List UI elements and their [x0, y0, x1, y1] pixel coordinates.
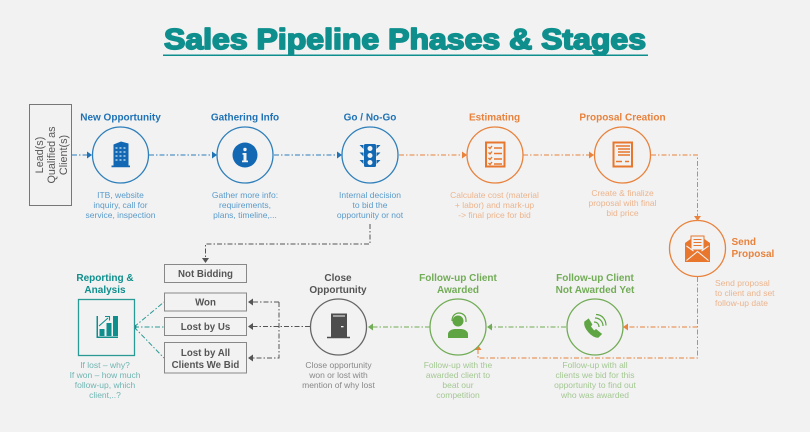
- panel: close opportunity: Close opportunity: [305, 360, 372, 370]
- icon: door: [327, 314, 350, 338]
- panel: proposal creation: bid price: [606, 208, 639, 218]
- panel: gathering info: requirements,: [219, 200, 271, 210]
- panel: go / no-go: Internal decision: [339, 190, 401, 200]
- panel: gathering info: plans, timeline,...: [213, 210, 277, 220]
- panel: gathering info: Gather more info:: [212, 190, 278, 200]
- panel: close opportunity: won or lost with: [308, 370, 368, 380]
- icon: building: [112, 142, 130, 167]
- status: won: [164, 293, 246, 311]
- arrow: gathering info to go/no-go: [274, 152, 342, 158]
- panel: follow-up client awarded: Follow-up Client: [419, 273, 498, 284]
- panel: follow-up client awarded: competition: [436, 390, 480, 400]
- arrow: new opportunity to gathering info: [149, 152, 217, 158]
- panel: estimating: Estimating: [469, 112, 520, 124]
- icon: checklist: [486, 142, 504, 166]
- arrow: go/no-go to not bidding: [202, 224, 370, 263]
- arrow: not awarded to awarded: [487, 324, 566, 330]
- panel: new opportunity: [80, 112, 161, 220]
- arrow: leads to new opportunity: [72, 152, 92, 158]
- icon: phone: [585, 314, 606, 337]
- panel: send proposal: Send: [732, 237, 756, 248]
- status: not bidding: Not Bidding: [178, 269, 233, 280]
- panel: go / no-go: to bid the: [353, 200, 388, 210]
- panel: send proposal: to client and set: [715, 288, 775, 298]
- panel: reporting and analysis: Analysis: [84, 285, 126, 296]
- status: lost by us: [164, 318, 246, 336]
- status: not bidding: [164, 264, 246, 282]
- panel: proposal creation: Proposal Creation: [579, 112, 666, 124]
- panel: go / no-go: [337, 112, 404, 220]
- panel: follow-up client awarded: Awarded: [437, 285, 479, 296]
- status: lost by us: Lost by Us: [181, 322, 230, 333]
- panel: reporting and analysis: Reporting &: [76, 273, 134, 284]
- box: leads qualified as clients: Lead(s): [34, 137, 46, 173]
- panel: follow-up client not awarded yet: who was awarded: [560, 390, 629, 400]
- panel: follow-up client not awarded yet: [554, 273, 637, 400]
- panel: follow-up client not awarded yet: Follow-up Client: [556, 273, 635, 284]
- panel: follow-up client not awarded yet: Follow-up with all: [562, 360, 628, 370]
- panel: new opportunity: New Opportunity: [80, 112, 161, 124]
- panel: reporting and analysis: client,..?: [89, 390, 121, 400]
- status: lost by all clients we bid: Lost by All: [181, 348, 230, 359]
- panel: follow-up client awarded: [419, 273, 498, 400]
- arrow: proposal creation to send proposal: [651, 155, 701, 221]
- status: lost by all clients we bid: [164, 342, 246, 373]
- panel: close opportunity: [302, 273, 376, 390]
- panel: reporting and analysis: [70, 273, 141, 400]
- panel: follow-up client not awarded yet: clients we bid for this: [556, 370, 634, 380]
- panel: new opportunity: ITB, website: [97, 190, 144, 200]
- panel: reporting and analysis: If won – how much: [70, 370, 141, 380]
- icon: headset person: [448, 313, 468, 338]
- panel: close opportunity: Close: [324, 273, 352, 284]
- icon: envelope with letter: [685, 236, 710, 262]
- arrow: estimating to proposal creation: [523, 152, 594, 158]
- box: leads qualified as clients: [30, 104, 72, 206]
- panel: close opportunity: Opportunity: [309, 285, 367, 296]
- panel: proposal creation: [579, 112, 666, 218]
- connector: outcomes to reporting: [132, 302, 164, 358]
- panel: estimating: [450, 112, 539, 220]
- status: lost by all clients we bid: Clients We Bid: [172, 360, 239, 371]
- panel: reporting and analysis: follow-up, which: [75, 380, 136, 390]
- status: won: Won: [195, 298, 216, 308]
- panel: send proposal: Send proposal: [715, 278, 770, 288]
- panel: send proposal: follow-up date: [715, 298, 768, 308]
- panel: go / no-go: opportunity or not: [337, 210, 404, 220]
- panel: new opportunity: inquiry, call for: [93, 200, 148, 210]
- panel: close opportunity: mention of why lost: [302, 380, 376, 390]
- panel: follow-up client not awarded yet: Not Awarded Yet: [556, 285, 635, 296]
- box: leads qualified as clients: Qualified as: [46, 126, 58, 184]
- panel: estimating: Calculate cost (material: [450, 190, 539, 200]
- panel: follow-up client not awarded yet: opportunity to find out: [554, 380, 637, 390]
- icon: document: [614, 142, 632, 166]
- panel: send proposal: Proposal: [732, 249, 775, 260]
- panel: proposal creation: Create & finalize: [591, 188, 654, 198]
- panel: follow-up client awarded: Follow-up with the: [424, 360, 493, 370]
- panel: estimating: + labor) and mark-up: [455, 200, 534, 210]
- panel: follow-up client awarded: awarded client to: [426, 370, 490, 380]
- panel: new opportunity: service, inspection: [86, 210, 156, 220]
- panel: proposal creation: proposal with final: [588, 198, 657, 208]
- icon: info: [232, 142, 258, 168]
- box: leads qualified as clients: Client(s): [58, 135, 70, 175]
- arrow: go/no-go to estimating: [399, 152, 467, 158]
- arrow: close opportunity to outcomes: [248, 298, 310, 362]
- title: Sales Pipeline Phases & Stages: [164, 24, 646, 56]
- panel: estimating: -> final price for bid: [458, 210, 531, 220]
- panel: send proposal: [670, 220, 775, 308]
- panel: reporting and analysis: If lost – why?: [80, 360, 130, 370]
- icon: traffic light: [360, 144, 380, 167]
- panel: gathering info: [211, 112, 279, 220]
- icon: bar chart: [96, 316, 118, 338]
- arrow: awarded to close opportunity: [368, 324, 430, 330]
- panel: follow-up client awarded: beat our: [442, 380, 474, 390]
- panel: go / no-go: Go / No-Go: [344, 112, 396, 124]
- panel: gathering info: Gathering Info: [211, 112, 279, 124]
- arrow: send proposal to follow-up branches: [474, 277, 698, 358]
